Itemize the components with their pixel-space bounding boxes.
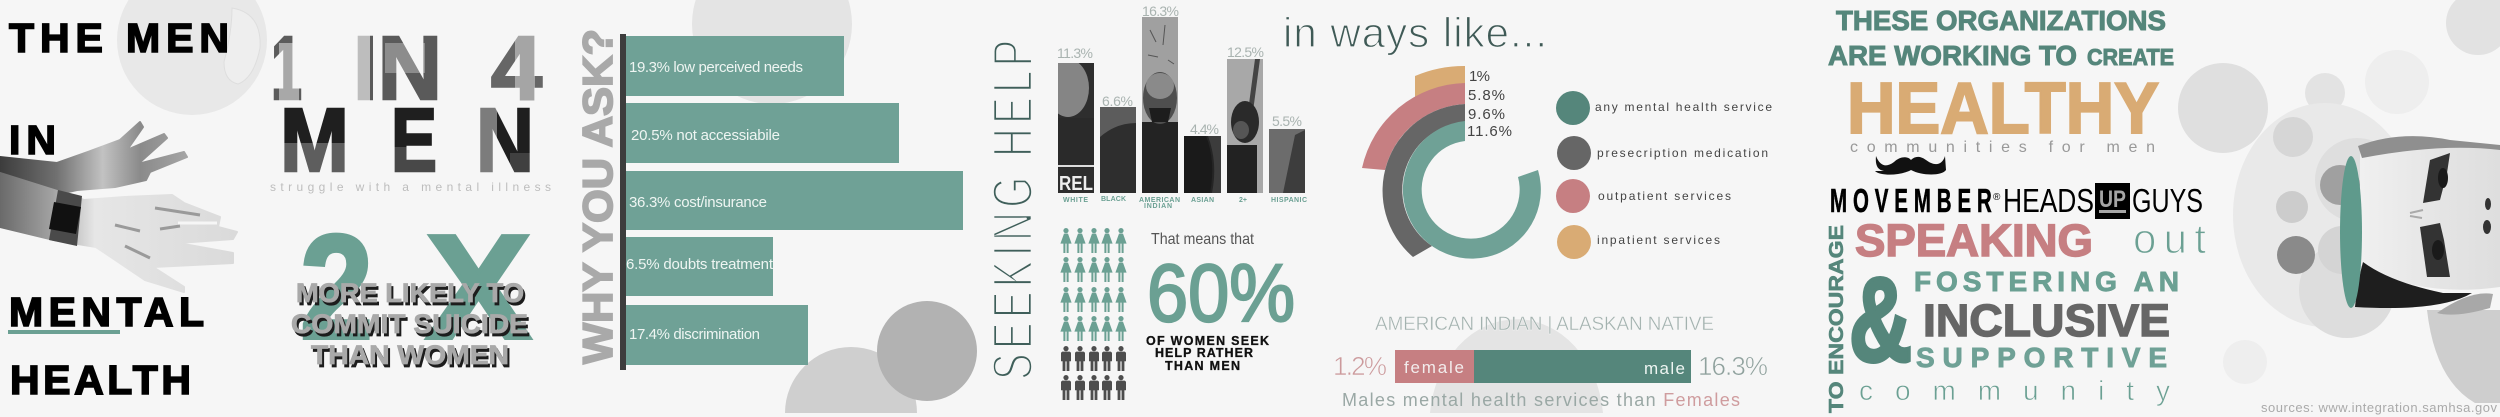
text: fostering an inclusive supportive community — [1859, 266, 2179, 406]
bar: asian 4.4%: ASIAN — [1191, 197, 1214, 204]
callout: more likely to commit suicide: COMMIT SUICIDE — [293, 312, 530, 342]
labels: donut percentages: 11.6% — [1467, 123, 1512, 140]
bar: white 11.3%: REL — [1059, 173, 1093, 195]
text: of women seek help: THAN MEN — [1165, 359, 1240, 373]
heading: these organizations: ARE WORKING TO — [1828, 40, 2077, 71]
heading: why you ask: WHY YOU ASK? — [574, 29, 621, 364]
icon: ampersand: & — [1849, 253, 1912, 387]
logos: movember and heads up guys: GUYS — [2132, 182, 2203, 219]
text: communities for men: communities for men — [1850, 139, 2155, 156]
stat: 1 in 4 men — [271, 19, 542, 191]
bar: asian 4.4%: 4.4% — [1190, 121, 1219, 137]
bar: hispanic 5.5%: 5.5% — [1272, 113, 1302, 129]
bar: black 6.6%: BLACK — [1101, 196, 1126, 203]
eyebrow and eye: lower — [2420, 223, 2450, 277]
sources: sources: www.integration.samhsa.gov — [2261, 400, 2498, 415]
stat: 1 in 4 men: M — [280, 91, 349, 191]
bar: black 6.6% — [1100, 93, 1136, 203]
chart: photo bars by race — [1047, 3, 1307, 210]
bar: asian 4.4% — [1184, 121, 1221, 204]
hair — [2355, 262, 2472, 308]
head and skin — [2360, 142, 2500, 290]
ear — [2437, 293, 2493, 315]
caption: males vs females: Males mental health services than Females — [1342, 390, 1740, 410]
heading: in ways like: in ways like... — [1283, 9, 1547, 56]
stat: 1 in 4 men: 4 — [491, 19, 542, 119]
watercolor circles behind bars — [692, 0, 977, 413]
chart: female male bar — [1333, 350, 1768, 383]
logos: movember and heads up guys: HEADS — [2003, 182, 2094, 219]
bar: white 11.3%: WHITE — [1063, 197, 1088, 204]
bar: cost/insurance: 36.3% cost/insurance — [629, 194, 767, 211]
bar: american indian 16.3% — [1139, 3, 1180, 210]
chart: female male bar: male — [1644, 359, 1685, 378]
text: fostering an inclusive supportive community: INCLUSIVE — [1923, 295, 2170, 346]
legend: services — [1556, 91, 1772, 259]
bar: 2+ 12.5%: 2+ — [1239, 197, 1247, 204]
heading: american indian alaskan native: AMERICAN INDIAN | ALASKAN NATIVE — [1375, 314, 1714, 335]
bar: low perceived needs: 19.3% low perceived needs — [629, 59, 803, 76]
stat: 1 in 4 men: N — [476, 91, 534, 191]
stat: 2X: X — [426, 205, 531, 370]
bar: not accessible — [626, 103, 899, 163]
watercolor circle behind comparison — [1430, 319, 1603, 413]
text: of women seek help — [1146, 334, 1269, 373]
chart: female male bar: 16.3% — [1698, 351, 1768, 381]
title — [9, 15, 229, 403]
subtitle: struggle with a mental illness: struggle with a mental illness — [270, 180, 551, 194]
bar: american indian 16.3%: INDIAN — [1144, 203, 1172, 210]
heading: these organizations — [1828, 5, 2174, 71]
chart: female male bar: female — [1404, 358, 1464, 377]
title: IN — [9, 117, 56, 163]
bar: hispanic 5.5%: HISPANIC — [1271, 197, 1307, 204]
text: speaking out — [1855, 215, 2206, 266]
bar: american indian 16.3%: AMERICAN — [1139, 197, 1180, 204]
text: of women seek help: HELP RATHER — [1155, 346, 1253, 360]
bar: cost/insurance — [626, 171, 963, 230]
stat: 1 in 4 men: IN — [353, 19, 442, 119]
stat: 2X: 2 — [300, 205, 373, 370]
arc: inpatient services — [1415, 66, 1465, 100]
legend: services: presecription medication — [1597, 146, 1768, 160]
stat: 2X — [300, 205, 531, 370]
eyebrow and eye: upper — [2423, 153, 2450, 203]
bar: doubts treatment: 6.5% doubts treatment — [626, 256, 774, 273]
legend: services: inpatient services — [1597, 233, 1720, 247]
arc: outpatient services — [1362, 83, 1465, 170]
nose — [2410, 210, 2423, 218]
text: that means that: That means that — [1151, 231, 1254, 248]
bar: doubts treatment — [626, 237, 774, 296]
bar: american indian 16.3%: 16.3% — [1142, 3, 1179, 19]
watercolor circles right — [2178, 0, 2500, 403]
bar: discrimination — [626, 305, 808, 365]
stat: 1 in 4 men: E — [391, 91, 437, 191]
text: of women seek help: OF WOMEN SEEK — [1146, 334, 1269, 348]
logos: movember and heads up guys: MOVEMBER — [1830, 182, 1992, 219]
icon: moustache — [1875, 156, 1946, 175]
callout: more likely to commit suicide: MORE LIKELY TO — [298, 281, 526, 311]
text: speaking out: SPEAKING — [1855, 215, 2093, 266]
teal ellipse overlay — [2340, 156, 2362, 308]
bar: not accessible: 20.5% not accessiabile — [631, 127, 780, 144]
title: THE MEN — [9, 15, 229, 61]
heading: seeking help: SEEKING HELP — [981, 40, 1045, 380]
callout: more likely to commit suicide: MORE LIKELY TO — [296, 278, 524, 308]
legend: services: any mental health service — [1595, 100, 1772, 114]
watercolor circle: top left — [117, 0, 267, 115]
bar: 2+ 12.5% — [1227, 44, 1264, 204]
labels: donut percentages: 5.8% — [1468, 87, 1505, 104]
callout: more likely to commit suicide: THAN WOMEN — [311, 340, 509, 370]
text: speaking out: out — [2133, 215, 2206, 262]
callout: more likely to commit suicide: THAN WOMEN — [313, 343, 511, 373]
heading: these organizations: THESE ORGANIZATIONS — [1836, 5, 2166, 36]
labels: donut percentages: 1% — [1469, 68, 1490, 85]
text: fostering an inclusive supportive community: SUPPORTIVE — [1916, 342, 2167, 373]
bar: discrimination: 17.4% discrimination — [629, 326, 760, 343]
chart: female male bar: 1.2% — [1333, 351, 1387, 381]
bar: black 6.6%: 6.6% — [1102, 93, 1133, 109]
arc: any mental health service — [1403, 121, 1541, 259]
logos: movember and heads up guys: UP — [2099, 186, 2126, 213]
text: fostering an inclusive supportive community: FOSTERING AN — [1914, 266, 2179, 297]
arc: prescription medication — [1383, 104, 1465, 257]
callout: more likely to commit suicide — [291, 278, 530, 373]
logos: movember and heads up guys: ® — [1993, 192, 2001, 203]
bar: white 11.3% — [1058, 48, 1094, 202]
donut chart: services — [1362, 66, 1541, 259]
bar chart: reasons — [620, 34, 963, 370]
bar: white 11.3%: 11.3% — [1057, 45, 1093, 61]
bar: hispanic 5.5% — [1269, 113, 1307, 204]
labels: donut percentages — [1467, 68, 1512, 140]
underline: men — [8, 330, 120, 334]
face: portrait — [2355, 136, 2500, 315]
logos: movember and heads up guys — [1830, 182, 2203, 219]
text: to encourage: TO ENCOURAGE — [1826, 225, 1848, 413]
heading: these organizations: CREATE — [2087, 44, 2174, 70]
callout: more likely to commit suicide: COMMIT SUICIDE — [291, 309, 528, 339]
title: MENTAL — [9, 289, 204, 335]
stat: 60%: 60% — [1147, 248, 1295, 339]
text: fostering an inclusive supportive community: community — [1859, 375, 2170, 406]
stat: 1 in 4 men: 1 — [271, 19, 302, 119]
legend: services: outpatient services — [1598, 189, 1731, 203]
bar: 2+ 12.5%: 12.5% — [1227, 44, 1264, 60]
labels: donut percentages: 9.6% — [1468, 106, 1505, 123]
bar: low perceived needs — [626, 36, 844, 96]
icon: hands with smartwatch — [0, 122, 237, 292]
title: HEALTH — [10, 357, 191, 403]
icon grid: women and men — [1060, 228, 1127, 400]
heading: healthy: HEALTHY — [1847, 69, 2159, 149]
